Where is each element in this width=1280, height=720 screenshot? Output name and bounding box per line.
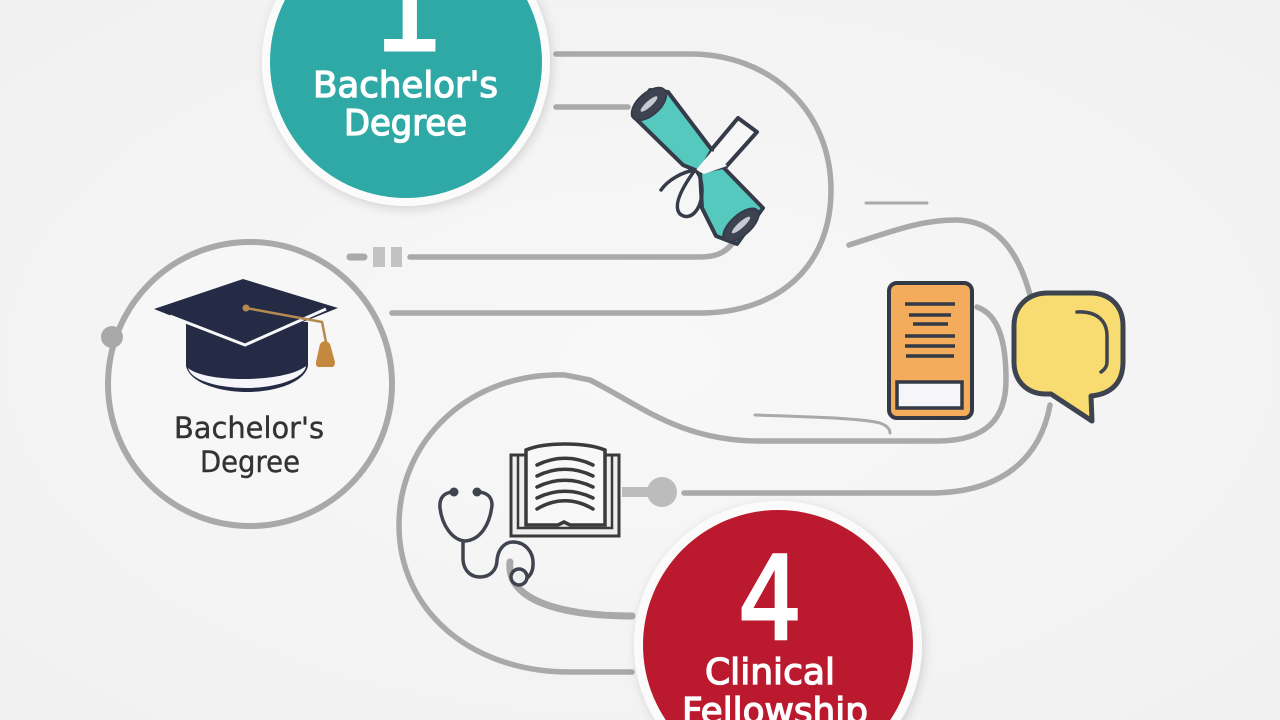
connector paths — [350, 54, 1050, 672]
panel: graduation circle: Degree — [200, 445, 300, 479]
panel: step 1 circle — [262, 0, 550, 206]
connector node — [647, 477, 677, 507]
step 4 number: 4 — [738, 533, 802, 667]
graduation label: Bachelor's — [174, 411, 324, 445]
step 1 label: Bachelor's — [313, 65, 498, 106]
icon: diploma scroll — [626, 82, 764, 247]
panel: graduation circle — [101, 242, 392, 526]
icon: orange book — [889, 283, 972, 418]
panel: step 1 circle: Degree — [344, 103, 467, 144]
icon: stethoscope — [440, 488, 533, 585]
step 4 label: Clinical — [705, 652, 835, 693]
icon: open book — [511, 444, 619, 536]
panel: step 4 circle — [634, 501, 922, 720]
icon: speech bubble — [1014, 293, 1123, 421]
icon: graduation cap — [154, 279, 338, 392]
